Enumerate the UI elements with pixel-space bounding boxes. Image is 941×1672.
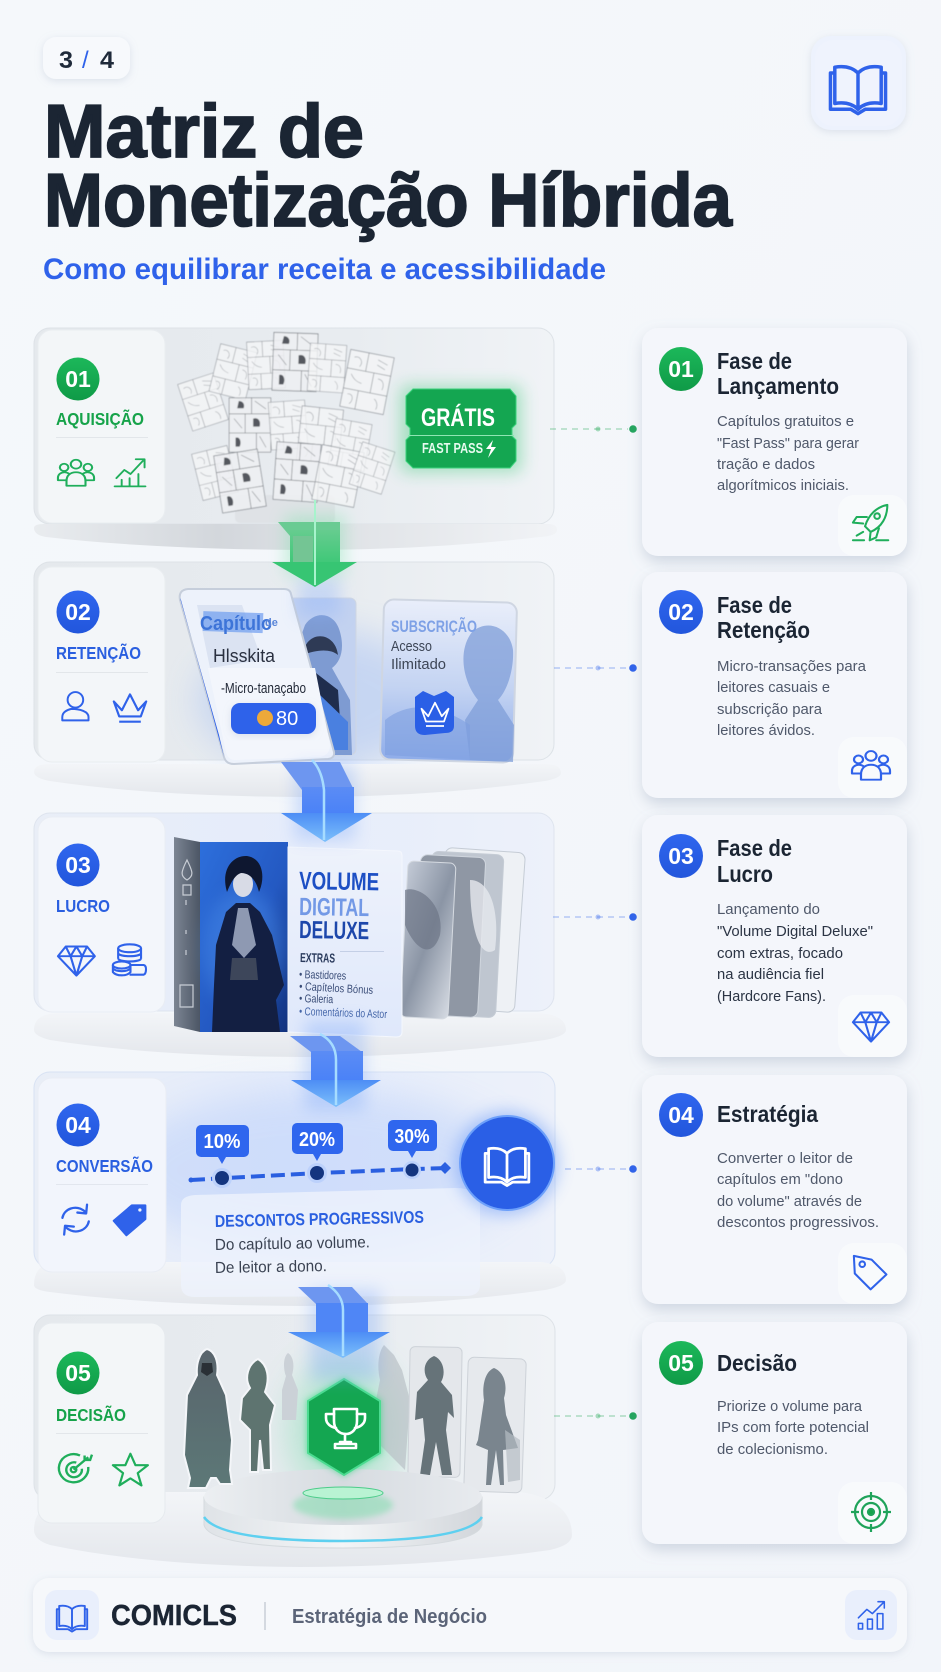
card: retenção label: RETENÇÃO: [56, 642, 141, 663]
card: lucro label: [38, 817, 165, 1012]
card: decisão label: 05: [65, 1360, 91, 1386]
illustration: volume digital deluxe box: EXTRAS: [300, 950, 335, 966]
card: descontos progressivos: Do capítulo ao volume.: [215, 1234, 370, 1254]
card: estratégia: Estratégia: [717, 1101, 818, 1127]
illustration: volume digital deluxe box: • Comentários do Astor: [299, 1006, 387, 1021]
illustration: acrylic cards: [400, 847, 525, 1019]
footer tagline: Estratégia de Negócio: [292, 1606, 487, 1628]
discount timeline: [188, 1120, 451, 1188]
card: decisão: [642, 1322, 907, 1544]
illustration: phone with micro-transaction: Hlsskita: [213, 646, 276, 666]
illustration: volume digital deluxe box: • Bastidores: [299, 969, 346, 983]
footer bar: [33, 1578, 907, 1652]
card: descontos progressivos: [181, 1188, 480, 1297]
badge 20%: [292, 1123, 343, 1183]
illustration: manga card behind phone: [285, 598, 356, 755]
icon: book medallion: [455, 1111, 559, 1215]
connector 02: [554, 664, 637, 672]
card: fase de retenção: [642, 572, 907, 798]
card: estratégia: [642, 1075, 907, 1304]
card: aquisição label: [38, 330, 165, 523]
illustration: phone with micro-transaction: Capítulo: [200, 613, 272, 635]
illustration: volume digital deluxe box: [174, 837, 402, 1037]
card: decisão: IPs com forte potencial: [717, 1419, 869, 1436]
card: retenção label: 02: [65, 599, 91, 625]
connector 01: [550, 425, 637, 433]
illustration: subscription card: [380, 599, 517, 763]
badge 10%: 10%: [204, 1131, 241, 1153]
card: fase de retenção: leitores casuais e: [717, 679, 830, 696]
card: decisão: Priorize o volume para: [717, 1398, 863, 1415]
card: decisão label: [38, 1323, 165, 1523]
card: fase de lançamento: Fase de: [717, 348, 792, 374]
card: conversão label: [38, 1078, 166, 1272]
ticket: grátis fast pass: FAST PASS: [422, 441, 483, 457]
illustration: volume digital deluxe box: DELUXE: [299, 916, 369, 945]
card: estratégia: capítulos em "dono: [717, 1171, 843, 1188]
panel 04: conversão: [34, 1072, 566, 1306]
page badge: 3 / 4: /: [82, 47, 89, 74]
illustration: subscription card: Ilimitado: [391, 657, 446, 673]
illustration: volume digital deluxe box: DIGITAL: [299, 893, 369, 922]
figures right: [376, 1345, 526, 1493]
card: aquisição label: 01: [65, 366, 91, 392]
card: estratégia: do volume" através de: [717, 1193, 862, 1210]
card: conversão label: 04: [65, 1112, 91, 1138]
illustration: volume digital deluxe box: VOLUME: [299, 867, 379, 896]
card: estratégia: Converter o leitor de: [717, 1150, 853, 1167]
panel 01: aquisição: [34, 328, 557, 550]
card: decisão: de colecionismo.: [717, 1441, 828, 1458]
card: fase de lucro: (Hardcore Fans).: [717, 988, 826, 1005]
card: aquisição label: AQUISIÇÃO: [56, 408, 144, 429]
ticket: grátis fast pass: [400, 385, 522, 473]
illustration: phone with micro-transaction: [180, 589, 334, 764]
arrow: 01 to 02: [272, 500, 357, 618]
shelf 03: [34, 1013, 566, 1057]
page badge: 3 / 4: 3: [59, 47, 73, 74]
shelf 04: [34, 1262, 566, 1306]
card: fase de lançamento: algorítmicos iniciais.: [717, 477, 849, 494]
subtitle: Como equilibrar receita e acessibilidade: [43, 253, 606, 286]
panel 05: decisão: [34, 1315, 572, 1567]
connector 03: [553, 913, 637, 921]
illustration: subscription card: Acesso: [391, 639, 432, 655]
shelf 02: [34, 764, 561, 797]
card: fase de lucro: Fase de: [717, 835, 792, 861]
cover character: [212, 856, 284, 1032]
badge 30%: 30%: [394, 1126, 430, 1148]
card: estratégia: 04: [668, 1102, 694, 1128]
card: fase de retenção: Micro-transações para: [717, 658, 867, 675]
card: fase de lançamento: [642, 328, 907, 556]
shelf 01: [34, 524, 557, 550]
badge 10%: [196, 1125, 249, 1188]
footer brand: COMICLS: [111, 1600, 237, 1632]
footer book icon: [45, 1590, 99, 1640]
illustration: podium: [204, 1469, 482, 1548]
illustration: green glow column: [289, 1360, 399, 1500]
card: fase de lucro: com extras, focado: [717, 945, 843, 962]
page badge: 3 / 4: 4: [100, 47, 115, 74]
card: fase de lançamento: 01: [668, 356, 694, 382]
icon: open book top right: [811, 36, 906, 130]
card: decisão label: DECISÃO: [56, 1404, 126, 1425]
card: conversão label: CONVERSÃO: [56, 1155, 153, 1176]
page badge: 3 / 4: [43, 37, 130, 79]
connector 04: [565, 1165, 637, 1173]
illustration: phone with micro-transaction: 80: [276, 708, 298, 730]
panel 02: retenção: [34, 562, 561, 797]
panel 03: lucro: [34, 813, 566, 1057]
card: fase de retenção: 02: [668, 599, 694, 625]
illustration: volume digital deluxe box: • Capítelos Bónus: [299, 981, 374, 997]
footer chart icon: [845, 1590, 897, 1640]
badge 20%: 20%: [299, 1129, 335, 1151]
card: retenção label: [38, 567, 165, 762]
card: fase de retenção: leitores ávidos.: [717, 722, 815, 739]
card: fase de lucro: [642, 815, 907, 1057]
card: descontos progressivos: De leitor a dono.: [215, 1258, 327, 1277]
card: fase de lançamento: Lançamento: [717, 373, 839, 399]
title: Monetização Híbrida: [44, 158, 733, 242]
arrow: 03 to 04: [290, 1020, 381, 1110]
card: fase de lançamento: tração e dados: [717, 456, 815, 473]
illustration: subscription card: SUBSCRIÇÃO: [391, 616, 477, 636]
illustration: phone with micro-transaction: de: [265, 617, 278, 629]
arrow: 04 to 05: [288, 1285, 390, 1380]
card: fase de retenção: Retenção: [717, 617, 810, 643]
connector 05: [554, 1412, 637, 1420]
card: fase de lucro: na audiência fiel: [717, 966, 824, 983]
figures left: [184, 1349, 298, 1488]
illustration: cascading manga pages: [178, 332, 395, 523]
card: decisão: 05: [668, 1350, 694, 1376]
card: decisão: Decisão: [717, 1350, 797, 1376]
title: Matriz de: [44, 89, 364, 173]
illustration: phone with micro-transaction: -Micro-tanaçabo: [221, 680, 306, 697]
card: lucro label: LUCRO: [56, 896, 110, 916]
card: fase de lucro: "Volume Digital Deluxe": [717, 923, 873, 940]
card: fase de lançamento: Capítulos gratuitos e: [717, 413, 854, 430]
hexagon trophy badge: [306, 1377, 382, 1477]
card: fase de retenção: Fase de: [717, 592, 792, 618]
card: estratégia: descontos progressivos.: [717, 1214, 879, 1231]
card: fase de retenção: subscrição para: [717, 701, 823, 718]
card: lucro label: 03: [65, 852, 91, 878]
shelf 05: [34, 1492, 572, 1567]
badge 30%: [388, 1120, 437, 1179]
illustration: volume digital deluxe box: • Galeria: [299, 993, 334, 1006]
card: fase de lucro: 03: [668, 843, 694, 869]
card: descontos progressivos: DESCONTOS PROGRESSIVOS: [215, 1208, 424, 1231]
arrow: 02 to 03: [281, 760, 372, 842]
card: fase de lançamento: "Fast Pass" para gerar: [717, 435, 859, 452]
title: [44, 89, 733, 242]
ticket: grátis fast pass: GRÁTIS: [421, 403, 495, 432]
card: fase de lucro: Lucro: [717, 861, 773, 887]
card: fase de lucro: Lançamento do: [717, 901, 820, 918]
